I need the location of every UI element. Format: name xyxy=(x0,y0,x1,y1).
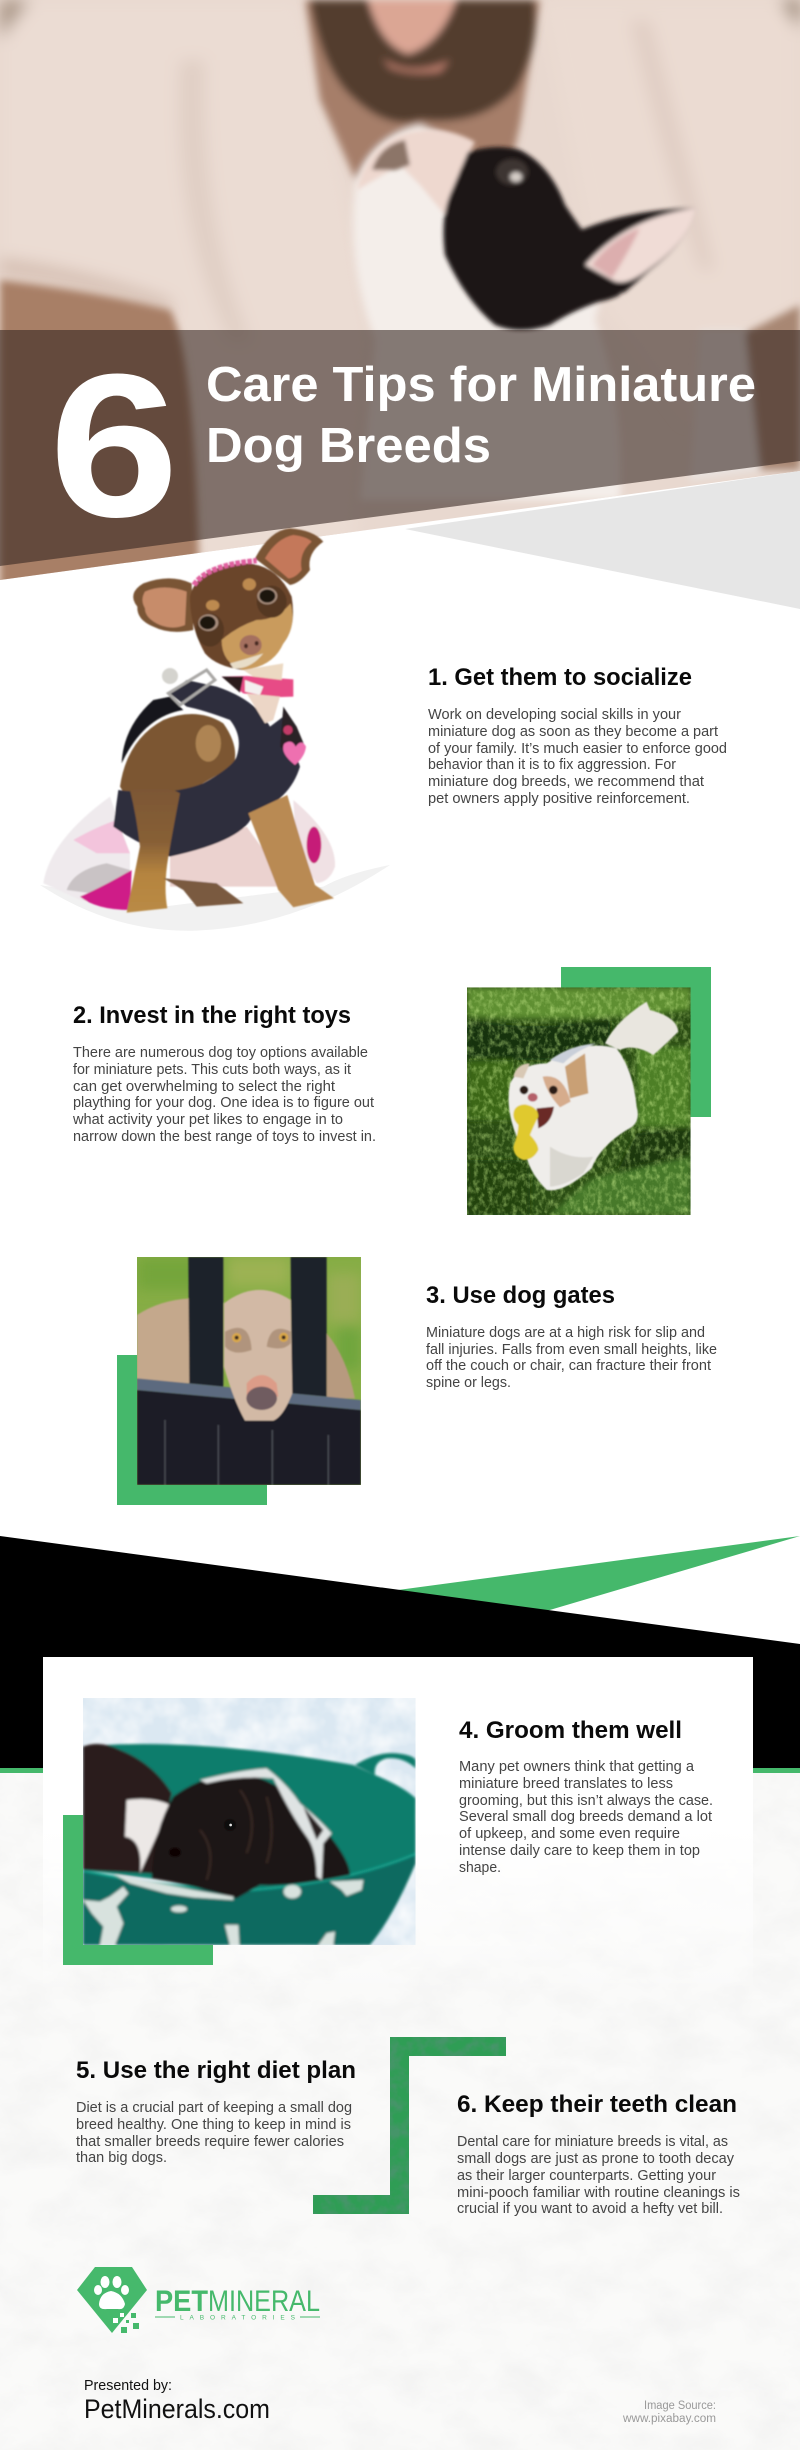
tip 5 heading: 5. Use the right diet plan xyxy=(76,2057,356,2084)
dark green bracket xyxy=(313,2037,506,2214)
nose xyxy=(240,635,262,655)
tagline rules xyxy=(155,2316,320,2318)
tip 1 body: Work on developing social skills in your xyxy=(428,707,681,723)
tip 4 body: grooming, but this isn’t always the case. xyxy=(459,1793,713,1809)
muzzle xyxy=(357,130,475,215)
yellow toy xyxy=(513,1104,538,1160)
grey triangle xyxy=(405,471,800,609)
dog ears and face xyxy=(565,1053,588,1098)
right arm xyxy=(712,305,800,470)
tip 4 body: shape. xyxy=(459,1860,501,1876)
tip 2 body: There are numerous dog toy options available xyxy=(73,1045,368,1061)
wordmark: PET xyxy=(155,2285,208,2318)
dog eye xyxy=(496,159,528,185)
headband xyxy=(194,561,257,585)
gate bars xyxy=(188,1257,223,1387)
tip 4 heading: 4. Groom them well xyxy=(459,1717,682,1744)
tip 5 text xyxy=(76,2057,356,2166)
green accent behind photo 2 xyxy=(561,967,711,1117)
tip 3 body: off the couch or chair, can fracture their front xyxy=(426,1358,711,1374)
white card fading into texture xyxy=(43,1657,753,1997)
rear dog xyxy=(83,1744,172,1873)
presented by: Presented by: xyxy=(84,2377,172,2394)
tip 4 text xyxy=(459,1717,713,1876)
tip 2 heading: 2. Invest in the right toys xyxy=(73,1002,351,1029)
image source xyxy=(622,2400,716,2425)
icon: diamond with paw xyxy=(77,2267,147,2333)
tip 6 body: small dogs are just as prone to tooth decay xyxy=(457,2151,735,2167)
tag xyxy=(280,707,305,763)
dog head xyxy=(224,1290,292,1421)
buckle xyxy=(168,670,215,705)
tip 3 body: spine or legs. xyxy=(426,1375,511,1391)
gate lower boards xyxy=(137,1390,361,1485)
dog 1: miniature pinscher in denim harness xyxy=(40,528,390,931)
nose xyxy=(368,0,456,54)
tip 6 body xyxy=(457,2134,740,2217)
tip 1 body: pet owners apply positive reinforcement. xyxy=(428,791,690,807)
translucent dark title band xyxy=(0,330,800,566)
tip 6 text xyxy=(457,2091,740,2217)
tip 4 body xyxy=(459,1759,713,1876)
tub inside xyxy=(83,1744,416,1890)
dog ear xyxy=(570,208,696,300)
tip 4 body: miniature breed translates to less xyxy=(459,1776,673,1792)
collar xyxy=(222,676,293,697)
image source: Image Source: xyxy=(644,2400,716,2412)
mouth xyxy=(382,58,450,73)
eye glint xyxy=(229,1824,232,1826)
main title: Dog Breeds xyxy=(206,419,491,473)
tip 6 body: as their larger counterparts. Getting your xyxy=(457,2168,716,2184)
dog body xyxy=(509,1045,638,1190)
dog black head xyxy=(444,147,620,330)
eyes xyxy=(196,613,224,647)
tip 2 text xyxy=(72,1002,376,1145)
tagline: LABORATORIES xyxy=(180,2314,296,2322)
tip 2 body: can get overwhelming to select the right xyxy=(73,1079,335,1095)
tip 3 text xyxy=(426,1282,717,1391)
dog body xyxy=(137,1298,190,1383)
tip 2 body: what activity your pet likes to engage in to xyxy=(72,1112,343,1128)
photo 3: weimaraner looking through a dark gate xyxy=(137,1257,361,1485)
main title: Care Tips for Miniature xyxy=(206,358,756,412)
tip 5 body: than big dogs. xyxy=(76,2150,167,2166)
green accent behind photo 3 xyxy=(117,1355,267,1505)
tip 1 body xyxy=(428,707,727,807)
tip 3 heading: 3. Use dog gates xyxy=(426,1282,615,1309)
title number 6: 6 xyxy=(49,332,179,560)
tip 6 body: Dental care for miniature breeds is vital, as xyxy=(457,2134,728,2150)
black diagonal band xyxy=(0,1536,800,1768)
ear left xyxy=(133,578,193,632)
foam on tub xyxy=(83,1875,363,1945)
green wedge xyxy=(398,1536,800,1612)
marble texture background xyxy=(0,1773,800,2450)
beard xyxy=(310,0,536,123)
neck xyxy=(305,0,540,190)
chest xyxy=(247,693,280,723)
gate rail xyxy=(137,1378,361,1410)
tip 1 body: miniature dog as soon as they become a part xyxy=(428,724,718,740)
tip 4 body: Several small dog breeds demand a lot xyxy=(459,1809,712,1825)
tip 2 body xyxy=(72,1045,376,1145)
tip 1 body: miniature dog breeds, we recommend that xyxy=(428,774,704,790)
tip 6 body: crucial if you want to avoid a hefty vet bill. xyxy=(457,2201,723,2217)
tip 2 body: plaything for your dog. One idea is to figure out xyxy=(73,1095,374,1111)
tip 5 body: breed healthy. One thing to keep in mind is xyxy=(76,2117,351,2133)
dog tail xyxy=(605,1002,678,1055)
tip 5 body xyxy=(76,2100,352,2166)
image source: www.pixabay.com xyxy=(622,2413,716,2425)
logo: Pet Mineral Laboratories xyxy=(77,2267,320,2333)
wordmark light: MINERAL xyxy=(208,2285,320,2318)
website: PetMinerals.com xyxy=(84,2394,270,2424)
main title xyxy=(206,358,756,473)
tip 4 body: intense daily care to keep them in top xyxy=(459,1843,700,1859)
tip 1 body: of your family. It’s much easier to enforce good xyxy=(428,741,727,757)
photo 2: white dog with yellow toy on grass xyxy=(467,987,691,1215)
base shadow xyxy=(40,865,390,931)
hero photo: man holding small dog xyxy=(0,0,800,600)
tip 4 body: Many pet owners think that getting a xyxy=(459,1759,695,1775)
tip 5 body: Diet is a crucial part of keeping a small dog xyxy=(76,2100,352,2116)
tip 6 body: mini-pooch familiar with routine cleanings is xyxy=(457,2185,740,2201)
photo 4: wet black dog in a teal tub xyxy=(83,1698,416,1945)
tub handle xyxy=(355,1753,416,1775)
tip 5 body: that smaller breeds require fewer calories xyxy=(76,2134,344,2150)
tub outer xyxy=(83,1853,416,1945)
tip 1 body: behavior than it is to fix aggression. For xyxy=(428,757,676,773)
head xyxy=(190,563,293,670)
dog white chest and neck xyxy=(353,125,621,500)
green accent behind photo 4 xyxy=(63,1815,213,1965)
green strip left xyxy=(0,1768,43,1773)
tip 3 body xyxy=(426,1325,717,1391)
tip 2 body: narrow down the best range of toys to invest in. xyxy=(73,1129,376,1145)
ear right xyxy=(255,528,323,585)
tip 3 body: fall injuries. Falls from even small heights, like xyxy=(426,1342,717,1358)
tip 1 heading: 1. Get them to socialize xyxy=(428,664,692,691)
green strip right xyxy=(753,1768,800,1773)
left arm xyxy=(0,280,200,600)
tip 1 text xyxy=(428,664,727,807)
shirt shading xyxy=(16,14,344,552)
tip 3 body: Miniature dogs are at a high risk for slip and xyxy=(426,1325,705,1341)
tip 4 body: of upkeep, and some even require xyxy=(459,1826,680,1842)
tip 6 heading: 6. Keep their teeth clean xyxy=(457,2091,737,2118)
front dog xyxy=(152,1773,350,1898)
tip 2 body: for miniature pets. This cuts both ways, as it xyxy=(73,1062,351,1078)
